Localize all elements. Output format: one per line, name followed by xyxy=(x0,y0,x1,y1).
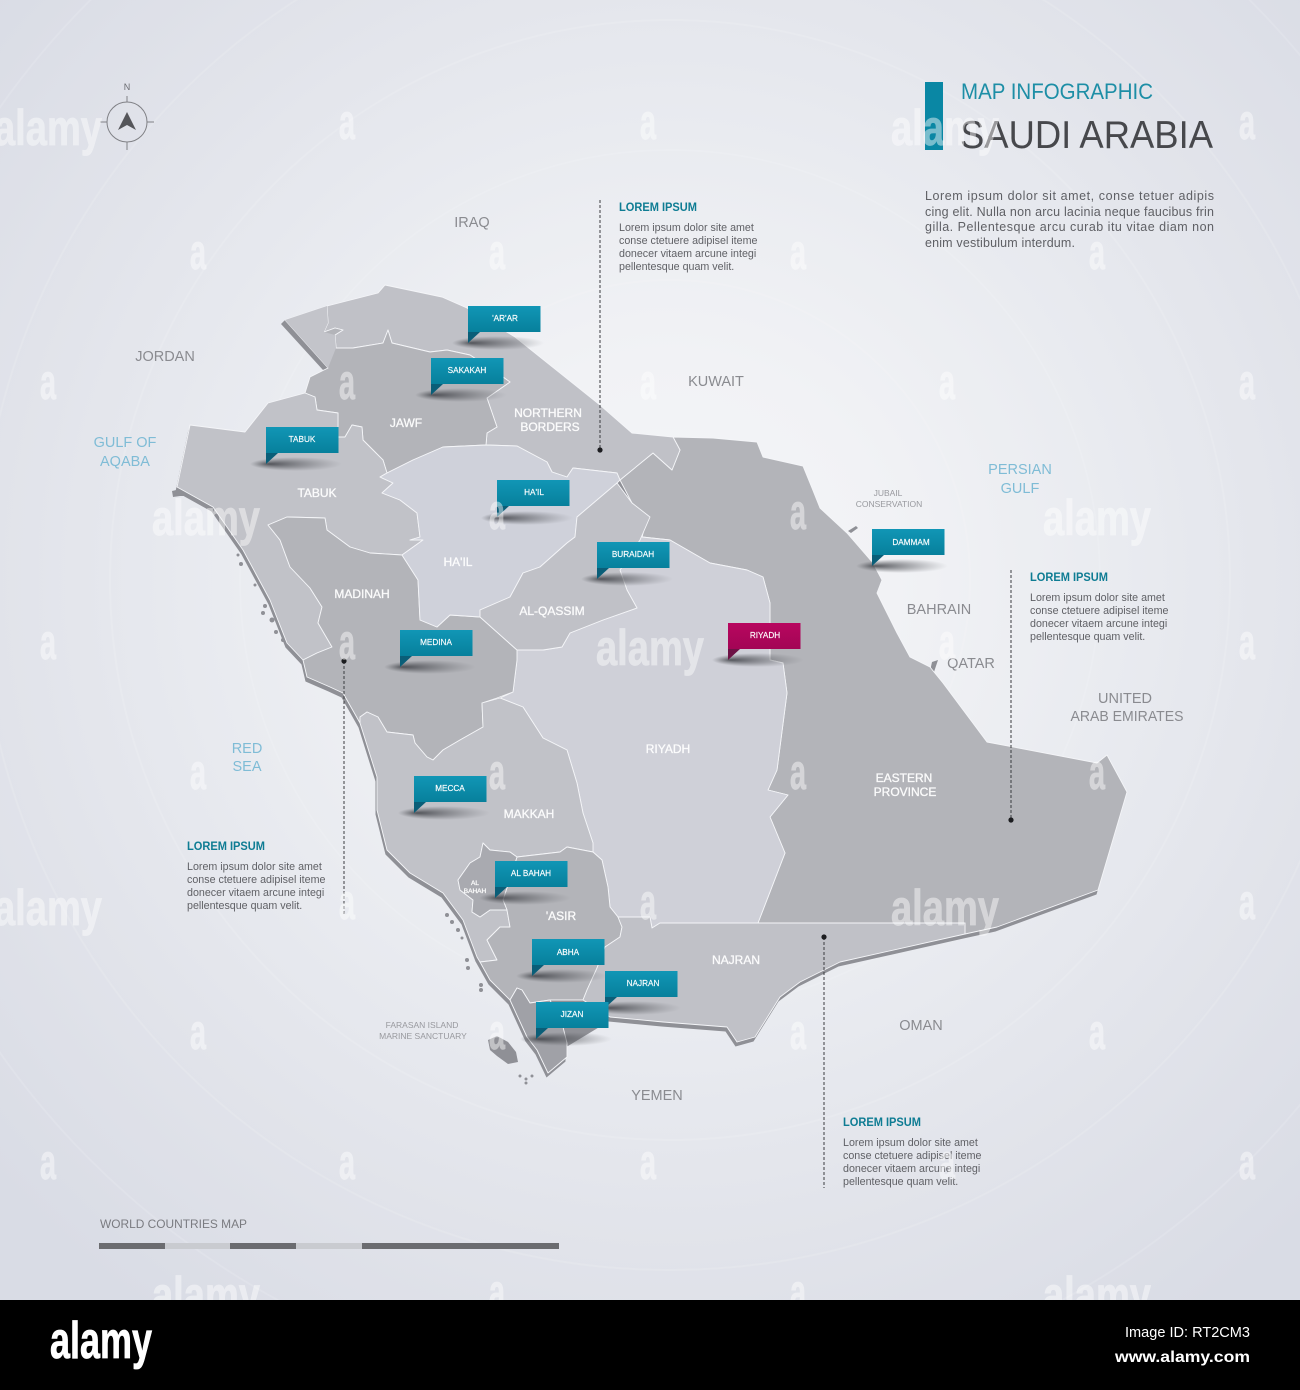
city tag: Tabuk xyxy=(250,427,342,471)
callout: bottom: conse ctetuere adipisel iteme xyxy=(843,1150,981,1162)
footer logo: alamy xyxy=(50,1312,152,1370)
neighbouring country labels: JORDAN xyxy=(135,349,195,365)
water labels: SEA xyxy=(232,759,262,775)
watermark pattern: a xyxy=(1239,874,1256,930)
region labels: HA'IL xyxy=(444,555,473,569)
region labels: AL xyxy=(471,880,479,887)
region: Jawf north-west strip xyxy=(285,306,336,368)
city tag: Najran xyxy=(589,971,681,1015)
region: Jawf xyxy=(285,306,510,473)
watermark pattern: a xyxy=(1239,94,1256,150)
region labels: TABUK xyxy=(297,486,337,500)
watermark pattern: a xyxy=(939,1134,956,1190)
watermark pattern: a xyxy=(40,354,57,410)
watermark pattern: a xyxy=(790,224,807,280)
watermark pattern: a xyxy=(190,1004,207,1060)
city tag: Sakakah xyxy=(415,358,507,402)
watermark pattern: a xyxy=(640,354,657,410)
watermark pattern: a xyxy=(640,874,657,930)
compass icon xyxy=(100,82,154,150)
region labels: 'ASIR xyxy=(546,909,576,923)
neighbouring country labels: BAHRAIN xyxy=(907,602,971,618)
neighbouring country labels: ARAB EMIRATES xyxy=(1070,709,1184,725)
watermark pattern: a xyxy=(489,1264,506,1320)
city tag: Riyadh (capital) xyxy=(712,623,804,667)
neighbouring country labels: OMAN xyxy=(899,1018,943,1034)
callout: top: conse ctetuere adipisel iteme xyxy=(619,235,757,247)
watermark pattern: a xyxy=(790,1264,807,1320)
watermark pattern: a xyxy=(1089,224,1106,280)
watermark pattern: a xyxy=(40,614,57,670)
water labels: AQABA xyxy=(100,454,150,470)
city tag: Ha'il xyxy=(481,480,573,525)
watermark pattern: alamy xyxy=(152,490,260,546)
region labels xyxy=(297,406,936,967)
water labels: GULF xyxy=(1001,481,1039,497)
city tag: Dammam xyxy=(856,529,948,573)
watermark pattern: a xyxy=(489,224,506,280)
callout: bottom xyxy=(821,934,981,1188)
callout: right: Lorem ipsum dolor site amet xyxy=(1030,592,1165,604)
region labels: NAJRAN xyxy=(712,953,760,967)
watermark pattern: a xyxy=(190,224,207,280)
watermark pattern: a xyxy=(489,744,506,800)
neighbouring country labels: IRAQ xyxy=(454,215,490,231)
watermark pattern: a xyxy=(1089,744,1106,800)
region labels: JAWF xyxy=(390,416,422,430)
city tag: Tabuk: TABUK xyxy=(289,435,316,444)
city tag: Mecca: MECCA xyxy=(435,784,465,793)
watermark pattern: a xyxy=(1239,354,1256,410)
region labels: BORDERS xyxy=(520,420,580,434)
callout: left xyxy=(187,658,347,915)
city tag: Buraidah: BURAIDAH xyxy=(612,550,654,559)
title block xyxy=(925,79,1213,157)
city tag: Najran: NAJRAN xyxy=(627,979,659,988)
watermark pattern: a xyxy=(339,874,356,930)
callout: left: conse ctetuere adipisel iteme xyxy=(187,874,325,886)
region labels: PROVINCE xyxy=(874,785,936,799)
scale bar with caption: WORLD COUNTRIES MAP xyxy=(100,1217,247,1231)
neighbouring country labels: YEMEN xyxy=(631,1088,683,1104)
title block: MAP INFOGRAPHIC xyxy=(961,79,1153,104)
city tag: Al Bahah: AL BAHAH xyxy=(511,869,551,878)
intro paragraph xyxy=(925,189,1214,250)
map of Saudi Arabia xyxy=(172,285,1127,1084)
city tag: 'Ar'ar: 'AR'AR xyxy=(492,314,518,323)
city tag: Jizan: JIZAN xyxy=(561,1010,583,1019)
city tag: Sakakah: SAKAKAH xyxy=(448,366,486,375)
city tag: 'Ar'ar xyxy=(452,306,544,350)
watermark pattern: a xyxy=(339,354,356,410)
region: Asir xyxy=(480,847,622,1003)
neighbouring country labels: KUWAIT xyxy=(688,374,744,390)
callout: right: LOREM IPSUM xyxy=(1030,572,1108,584)
callout: top: Lorem ipsum dolor site amet xyxy=(619,222,754,234)
water labels xyxy=(94,435,1052,775)
watermark pattern: alamy xyxy=(891,880,999,936)
region: Najran xyxy=(583,917,965,1042)
region: Northern Borders xyxy=(324,285,680,480)
watermark pattern: a xyxy=(939,614,956,670)
region: Jizan xyxy=(510,988,567,1073)
callout: left: LOREM IPSUM xyxy=(187,841,265,853)
neighbouring country labels xyxy=(135,215,1184,1104)
region: Riyadh xyxy=(500,517,788,928)
intro paragraph: enim vestibulum interdum. xyxy=(925,236,1075,250)
watermark pattern: a xyxy=(790,484,807,540)
region labels: AL-QASSIM xyxy=(519,604,585,618)
callout: right xyxy=(1008,570,1168,823)
intro paragraph: cing elit. Nulla non arcu lacinia neque faucibus frin xyxy=(925,205,1214,219)
watermark pattern: alamy xyxy=(152,1267,260,1323)
city tag: Ha'il: HA'IL xyxy=(524,488,544,497)
region labels: BAHAH xyxy=(464,888,486,895)
region: Tabuk xyxy=(177,393,423,660)
intro paragraph: Lorem ipsum dolor sit amet, conse tetuer adipis xyxy=(925,189,1214,203)
compass icon: N xyxy=(124,82,130,92)
city tag: Buraidah xyxy=(581,542,673,586)
footer image id: www.alamy.com xyxy=(1114,1349,1250,1366)
city tag: Jizan xyxy=(520,1002,612,1046)
callout: right: pellentesque quam velit. xyxy=(1030,631,1145,643)
map north-west side xyxy=(281,320,328,370)
city tag: Dammam: DAMMAM xyxy=(892,538,930,547)
city tag: Medina: MEDINA xyxy=(420,638,452,647)
region: Makkah xyxy=(360,698,593,962)
callout: top: pellentesque quam velit. xyxy=(619,261,734,273)
region labels: EASTERN xyxy=(876,771,932,785)
callout: bottom: donecer vitaem arcune integi xyxy=(843,1163,980,1175)
title block: SAUDI ARABIA xyxy=(960,114,1213,157)
region labels: MADINAH xyxy=(334,587,390,601)
footer image id xyxy=(1114,1324,1250,1366)
watermark pattern: a xyxy=(1239,614,1256,670)
scale bar with caption xyxy=(99,1217,559,1249)
watermark pattern: a xyxy=(1239,1134,1256,1190)
watermark pattern: alamy xyxy=(596,620,704,676)
water labels: RED xyxy=(232,741,262,757)
watermark pattern: a xyxy=(790,744,807,800)
footer image id: Image ID: RT2CM3 xyxy=(1125,1324,1250,1341)
watermark pattern: a xyxy=(489,484,506,540)
callout: left: donecer vitaem arcune integi xyxy=(187,887,324,899)
callout: left: Lorem ipsum dolor site amet xyxy=(187,861,322,873)
callout: top: LOREM IPSUM xyxy=(619,202,697,214)
region labels: NORTHERN xyxy=(514,406,582,420)
region: Ha'il xyxy=(380,445,620,627)
callout: right: conse ctetuere adipisel iteme xyxy=(1030,605,1168,617)
conservation labels: MARINE SANCTUARY xyxy=(379,1031,467,1041)
watermark pattern: a xyxy=(339,1134,356,1190)
watermark pattern: a xyxy=(190,744,207,800)
watermark pattern: alamy xyxy=(1043,1267,1151,1323)
neighbouring country labels: QATAR xyxy=(947,656,995,672)
conservation labels: JUBAIL xyxy=(874,488,903,498)
region labels: RIYADH xyxy=(646,742,690,756)
map 3D side xyxy=(176,290,1126,1078)
intro paragraph: gilla. Pellentesque arcu curab itu vitae diam non xyxy=(925,220,1214,234)
region: Madinah xyxy=(268,517,517,760)
callout: top xyxy=(597,200,757,453)
callout: left: pellentesque quam velit. xyxy=(187,900,302,912)
region: Al Bahah xyxy=(458,843,517,917)
water labels: PERSIAN xyxy=(988,462,1052,478)
watermark pattern: a xyxy=(339,94,356,150)
city tag: Abha xyxy=(516,939,608,983)
callout: right: donecer vitaem arcune integi xyxy=(1030,618,1167,630)
watermark pattern: a xyxy=(790,1004,807,1060)
callout: top: donecer vitaem arcune integi xyxy=(619,248,756,260)
city tag: Al Bahah xyxy=(479,861,571,905)
region: Al-Qassim xyxy=(480,483,650,650)
conservation labels: FARASAN ISLAND xyxy=(386,1020,458,1030)
watermark pattern: a xyxy=(339,614,356,670)
water labels: GULF OF xyxy=(94,435,157,451)
watermark pattern: a xyxy=(489,1004,506,1060)
watermark pattern: a xyxy=(640,94,657,150)
city tag: Medina xyxy=(384,630,476,674)
region: Eastern Province xyxy=(620,437,1127,934)
conservation labels xyxy=(379,488,922,1041)
city tag: Riyadh (capital): RIYADH xyxy=(750,631,780,640)
watermark pattern: a xyxy=(40,1134,57,1190)
callout: bottom: Lorem ipsum dolor site amet xyxy=(843,1137,978,1149)
islands xyxy=(172,488,938,1084)
callout: bottom: LOREM IPSUM xyxy=(843,1117,921,1129)
callout: bottom: pellentesque quam velit. xyxy=(843,1176,958,1188)
city tag: Abha: ABHA xyxy=(557,948,580,957)
watermark pattern: alamy xyxy=(1043,490,1151,546)
conservation labels: CONSERVATION xyxy=(856,499,922,509)
watermark pattern: alamy xyxy=(891,100,999,156)
neighbouring country labels: UNITED xyxy=(1098,691,1152,707)
watermark pattern: a xyxy=(939,354,956,410)
footer bar xyxy=(0,1300,1300,1390)
watermark pattern: a xyxy=(640,1134,657,1190)
region labels: MAKKAH xyxy=(504,807,554,821)
city tag: Mecca xyxy=(398,776,490,820)
watermark pattern: a xyxy=(1089,1004,1106,1060)
